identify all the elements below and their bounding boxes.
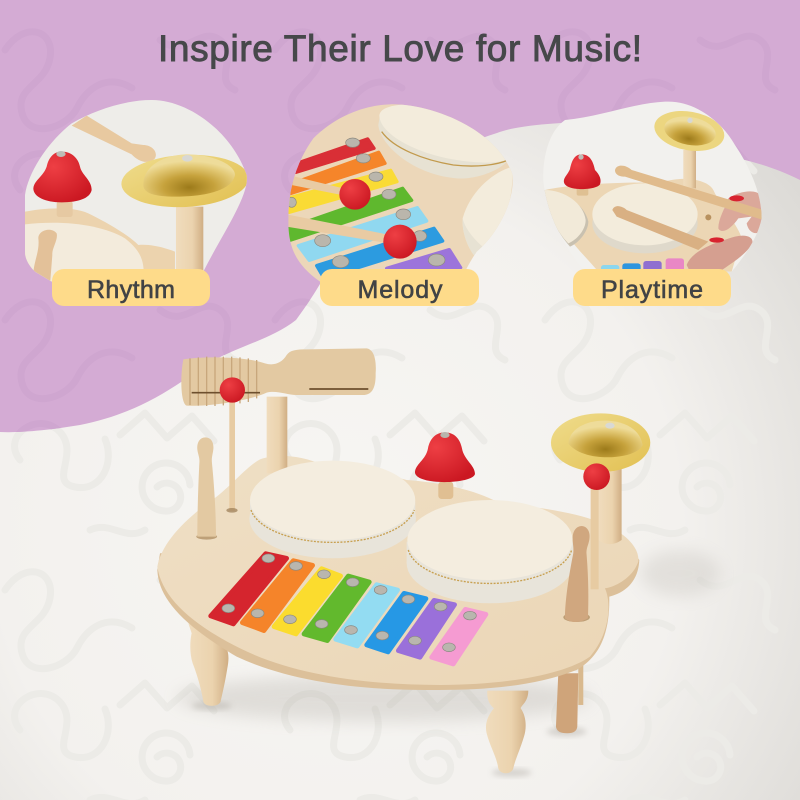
- bar: orange: [242, 561, 313, 631]
- bar: purple: [398, 600, 455, 657]
- label: playtime: [573, 269, 731, 306]
- tone block: [181, 348, 376, 406]
- cymbal stand: [551, 413, 650, 544]
- board: [157, 456, 639, 690]
- rivets: [222, 554, 476, 652]
- title: Inspire Their Love for Music!: [158, 28, 642, 69]
- left stick post: [267, 397, 287, 473]
- label: rhythm: [52, 269, 210, 306]
- bar: yellow: [274, 569, 341, 634]
- panel: rhythm: [25, 100, 247, 306]
- drum: right: [407, 500, 573, 603]
- label: melody: Melody: [358, 276, 443, 304]
- xylophone: [211, 554, 486, 664]
- left mallet: [220, 377, 245, 513]
- toy drum set: [157, 348, 720, 777]
- photo: bell and cymbal: [25, 100, 247, 282]
- bar: blue: [367, 593, 426, 652]
- front leg: [486, 691, 528, 773]
- right drumstick: [563, 526, 590, 622]
- label: rhythm: Rhythm: [87, 276, 175, 304]
- back pegs: [556, 665, 583, 733]
- label: melody: [320, 269, 479, 306]
- bell: [415, 432, 475, 499]
- purple header shape: [0, 0, 800, 432]
- bar: green: [304, 576, 369, 641]
- left drumstick: [196, 437, 217, 540]
- shadows: [177, 550, 720, 777]
- bar: light blue: [336, 585, 398, 646]
- label: playtime: Playtime: [601, 276, 703, 304]
- bar: pink: [432, 609, 486, 664]
- panel: melody: [288, 104, 513, 306]
- photo: hands playing drum: [544, 102, 762, 272]
- left leg: [188, 623, 228, 706]
- panel: playtime: [544, 102, 762, 306]
- photo: xylophone and mallets: [288, 104, 513, 282]
- bar: red: [211, 554, 287, 624]
- drum: left: [249, 461, 416, 558]
- right mallet: [583, 463, 610, 589]
- purple squiggle pattern: [0, 0, 800, 432]
